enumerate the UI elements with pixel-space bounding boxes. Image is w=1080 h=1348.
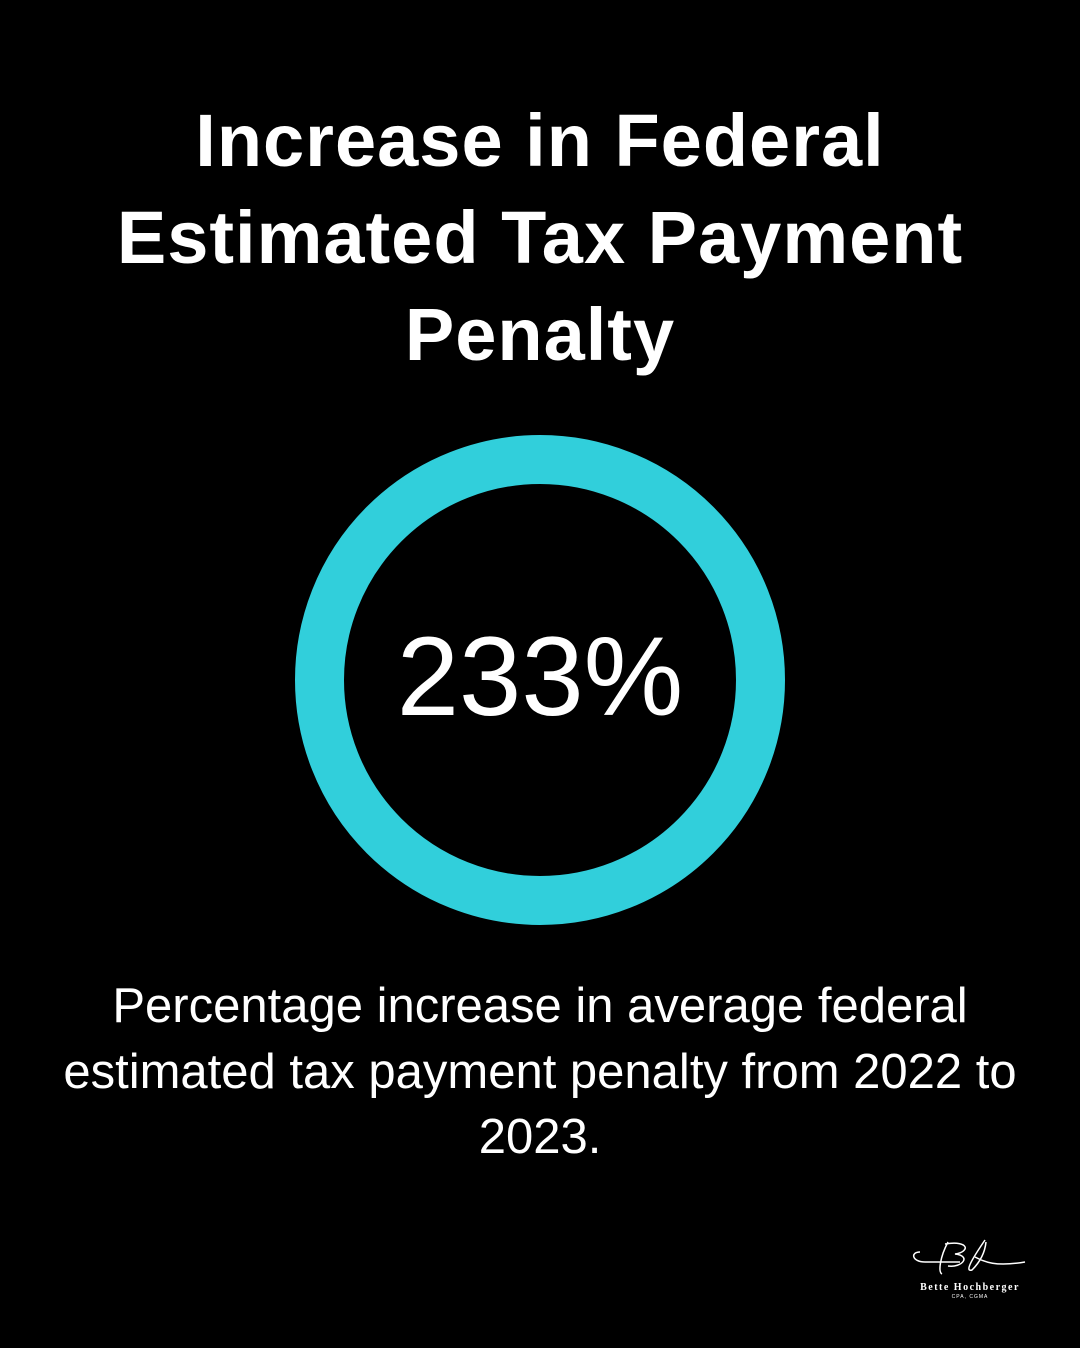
description text: estimated tax payment penalty from 2022 to xyxy=(63,1044,1017,1098)
description text xyxy=(63,979,1017,1164)
title xyxy=(117,99,963,376)
big number: 233% xyxy=(397,614,683,739)
description text: Percentage increase in average federal xyxy=(112,979,968,1033)
title: Estimated Tax Payment xyxy=(117,196,963,279)
logo: CPA, CGMA xyxy=(952,1294,988,1300)
title: Increase in Federal xyxy=(195,99,885,182)
title: Penalty xyxy=(405,293,675,376)
logo xyxy=(912,1240,1026,1300)
logo: Bette Hochberger xyxy=(920,1282,1020,1293)
description text: 2023. xyxy=(479,1110,601,1164)
